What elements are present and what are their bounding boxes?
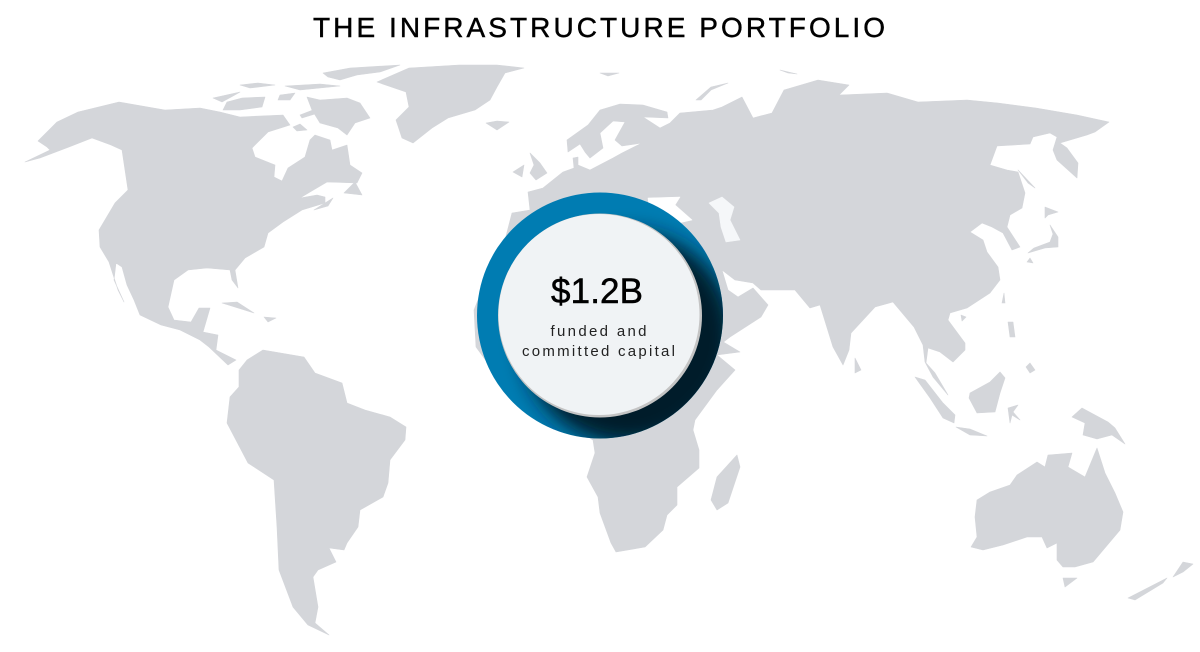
map: Greenland bbox=[377, 65, 524, 143]
description bbox=[522, 323, 675, 360]
map: Hispaniola bbox=[264, 317, 276, 322]
map: New Guinea bbox=[1072, 408, 1125, 444]
map: Cuba bbox=[222, 302, 254, 313]
map: Sumatra bbox=[915, 377, 955, 423]
description: funded and bbox=[550, 323, 646, 340]
map: Philippines bbox=[1008, 322, 1035, 373]
map: Ireland bbox=[513, 165, 524, 177]
map: Iceland bbox=[486, 121, 509, 130]
description: committed capital bbox=[522, 343, 675, 360]
title: THE INFRASTRUCTURE PORTFOLIO bbox=[313, 12, 885, 43]
blue ring bbox=[477, 192, 723, 438]
map: Borneo bbox=[969, 372, 1005, 413]
inner disc bbox=[498, 214, 702, 418]
map: Tasmania bbox=[1063, 578, 1077, 587]
value: $1.2B bbox=[551, 272, 643, 311]
map: Java bbox=[956, 427, 987, 436]
map: South America bbox=[227, 350, 406, 635]
map: Sri Lanka bbox=[855, 358, 861, 373]
map: Australia bbox=[971, 448, 1123, 567]
map: Eurasia bbox=[500, 80, 1109, 395]
map: Sulawesi bbox=[1008, 405, 1020, 423]
map: New Zealand bbox=[1128, 562, 1193, 600]
map: Arctic islands bbox=[213, 65, 400, 135]
map: Madagascar bbox=[711, 455, 740, 510]
map: North America bbox=[25, 102, 362, 365]
map: Nova Scotia bbox=[314, 198, 333, 210]
map: Arctic Russia islands bbox=[600, 70, 797, 100]
ring shadow bbox=[522, 232, 734, 444]
map: Africa bbox=[474, 240, 740, 552]
map: Caspian Sea bbox=[709, 197, 740, 242]
map: Newfoundland bbox=[344, 182, 362, 195]
map: Great Britain bbox=[530, 153, 547, 180]
map: Black Sea bbox=[648, 197, 692, 225]
map: Japan and East Asian islands bbox=[961, 170, 1058, 321]
capital callout bbox=[477, 192, 734, 444]
